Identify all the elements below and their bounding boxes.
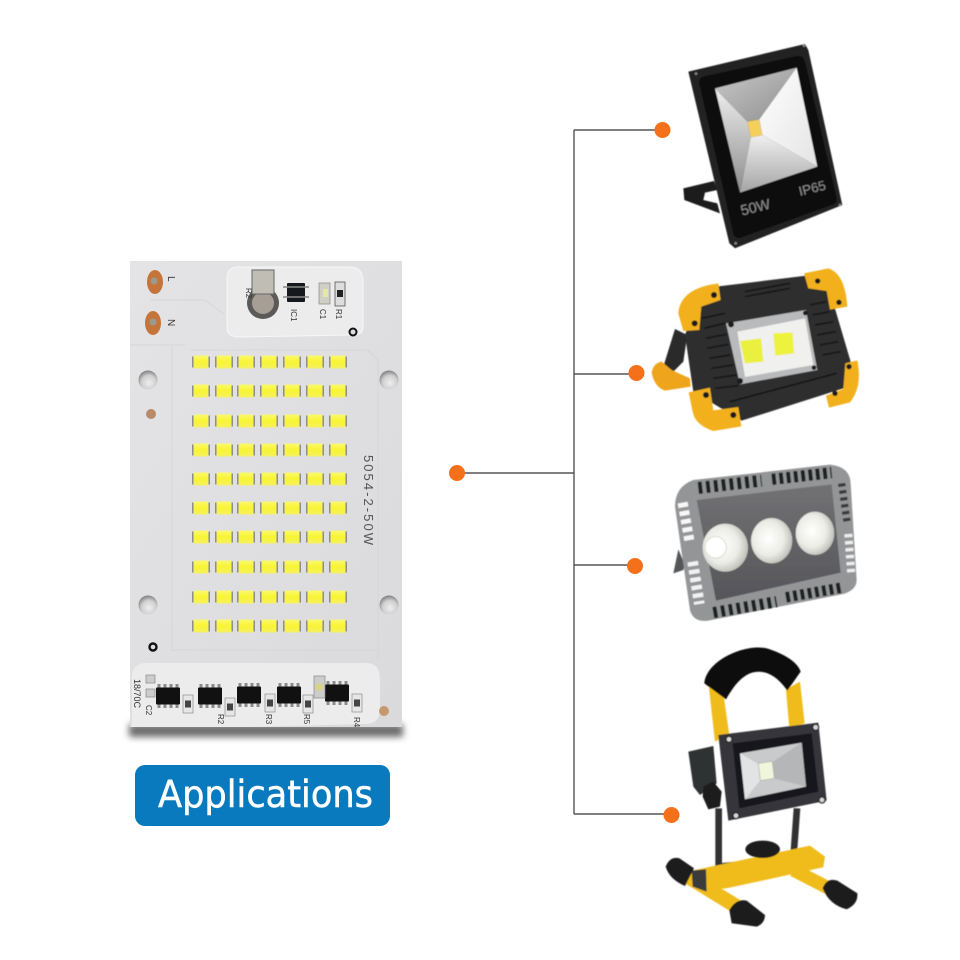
front panel [697, 484, 841, 601]
reflector [740, 743, 806, 799]
power marking: 50W [739, 197, 772, 220]
applications label button: Applications [158, 773, 373, 816]
lamp head [718, 723, 827, 821]
input pads L and N [145, 270, 176, 335]
COB chip [758, 761, 774, 781]
input pads L and N: L [165, 276, 176, 282]
COB LEDs [740, 338, 763, 363]
stand bracket [683, 181, 720, 213]
foam grip [704, 647, 801, 699]
board model marking: 5054-2-50W [361, 455, 376, 546]
LED circuit board [129, 261, 403, 737]
input pads L and N: N [165, 319, 176, 326]
bottom driver module [132, 663, 389, 728]
vent slots [683, 473, 851, 613]
lens bezel [726, 310, 817, 384]
lamp 1: slim black 50W floodlight [683, 44, 842, 248]
connector dots [449, 122, 680, 823]
base and legs [666, 846, 857, 927]
top driver module: R2 [244, 288, 253, 299]
bottom driver module: C2 [144, 705, 153, 716]
COB chip [747, 119, 762, 137]
bottom driver module: R3 [264, 714, 273, 725]
reflector facets [715, 68, 817, 193]
lamp 2: yellow portable work light [652, 268, 859, 431]
lenses [703, 512, 834, 572]
side knob [703, 782, 722, 809]
top driver module [227, 267, 363, 337]
housing [688, 44, 842, 248]
top driver module: IC1 [289, 309, 298, 322]
screws [695, 44, 841, 245]
lamp 4: rechargeable stand floodlight [666, 647, 857, 927]
bottom driver module: R2 [216, 714, 225, 725]
top driver module: R1 [334, 309, 343, 320]
top driver module: C1 [318, 309, 327, 320]
bottom driver module: R5 [302, 714, 311, 725]
mounting holes [138, 370, 398, 614]
bottom driver module: R4 [352, 717, 361, 728]
housing ribs [702, 283, 841, 402]
applications label button [135, 765, 390, 826]
housing [685, 276, 851, 421]
yellow handle tubes [709, 685, 729, 742]
stand [673, 549, 685, 573]
screws [692, 278, 852, 418]
stand frame [719, 808, 797, 867]
bottom driver module: 18/70C [132, 679, 142, 709]
lamp 3: grey three-lens floodlight [673, 465, 857, 621]
IP rating marking: IP65 [797, 178, 827, 199]
adjusting knob [745, 841, 780, 858]
battery box [688, 746, 717, 795]
LED array [192, 356, 347, 632]
folding stand [652, 329, 691, 391]
rubber corners [678, 268, 859, 431]
screws [726, 724, 825, 819]
connector lines [457, 130, 671, 814]
housing [675, 465, 857, 621]
